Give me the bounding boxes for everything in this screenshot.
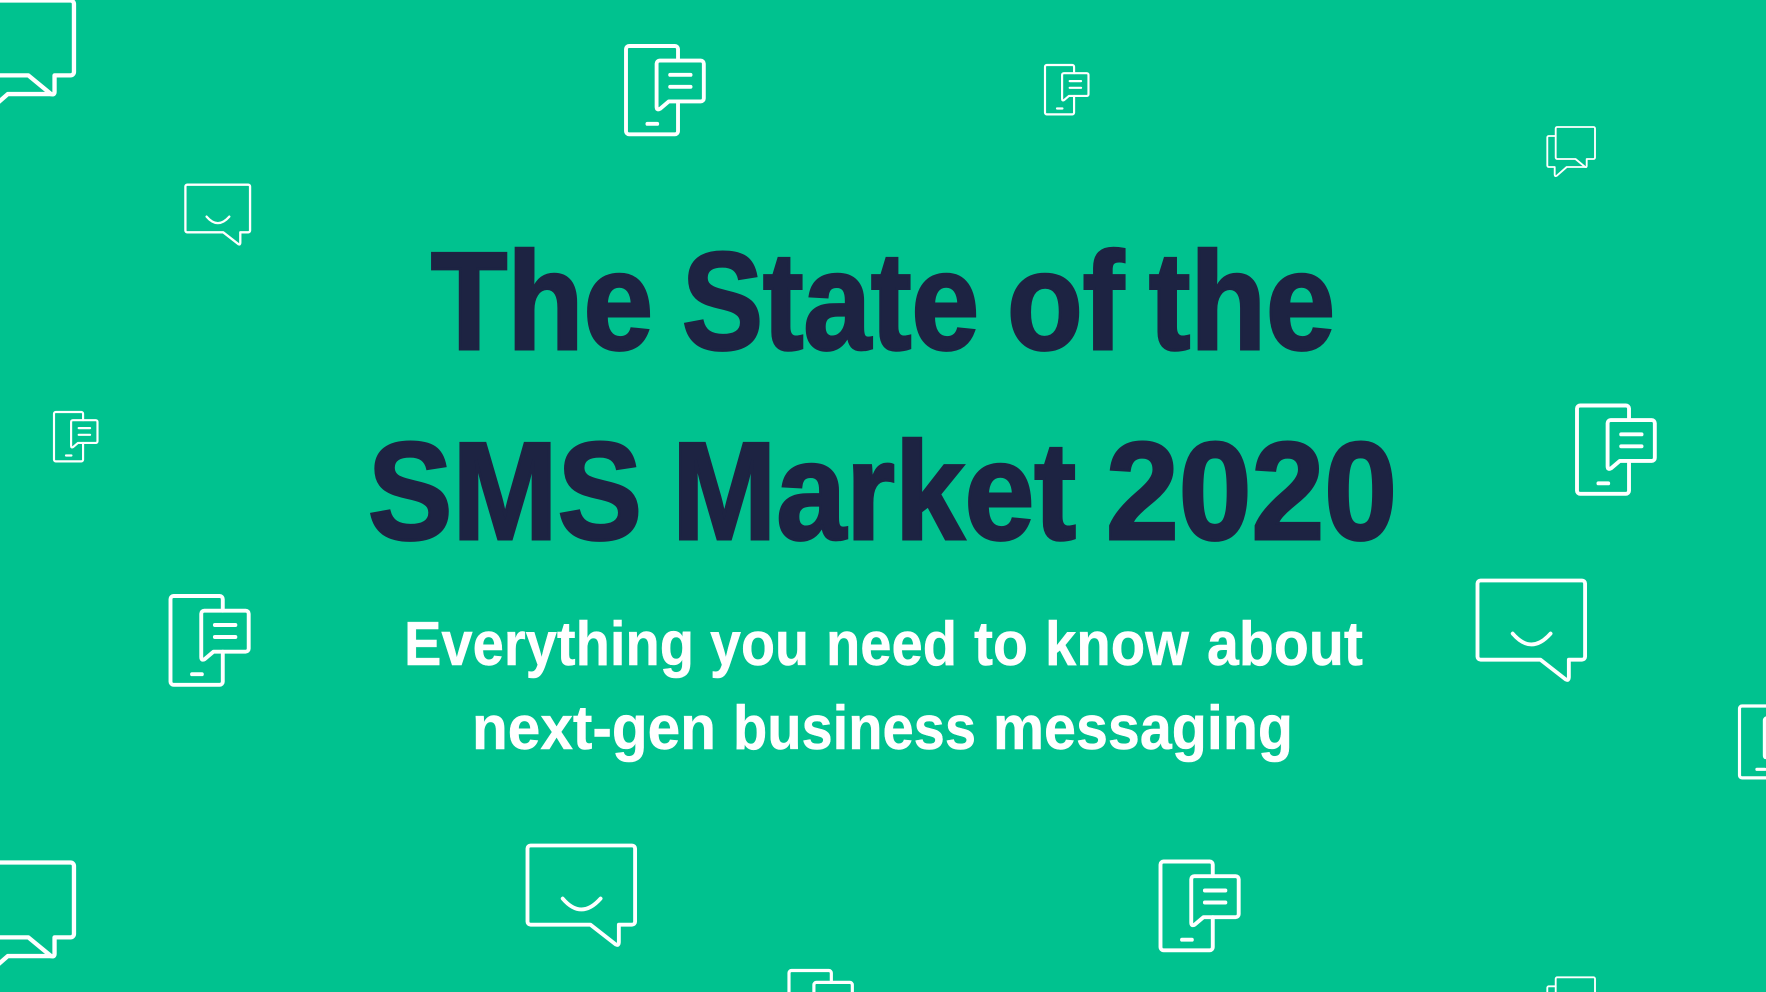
icon: phone message bottom edge	[789, 970, 852, 992]
icon: speech bubbles bottom right	[1547, 977, 1595, 992]
icon: phone message top centre	[626, 46, 704, 134]
title: of	[1007, 224, 1125, 379]
title: the	[1149, 224, 1335, 379]
icon: small phone message top	[1045, 65, 1088, 114]
icon: small phone message left	[54, 412, 97, 461]
icon: smile bubble bottom	[528, 846, 635, 945]
title	[368, 224, 1397, 569]
title: 2020	[1106, 414, 1397, 569]
icon: speech bubbles top right	[1547, 127, 1595, 176]
subtitle: to	[974, 610, 1028, 679]
subtitle: know	[1045, 610, 1190, 679]
subtitle	[404, 610, 1363, 763]
icon: speech bubbles top left	[0, 0, 74, 115]
subtitle: need	[826, 610, 957, 679]
subtitle: next-gen	[472, 694, 716, 763]
icon: phone message right	[1577, 406, 1655, 494]
title: State	[682, 224, 979, 379]
subtitle: you	[710, 610, 809, 679]
icon: smile bubble right	[1478, 580, 1585, 680]
icon: speech bubbles bottom left	[0, 862, 74, 977]
icon: phone message right edge	[1740, 706, 1766, 778]
subtitle: Everything	[404, 610, 694, 679]
subtitle: messaging	[993, 694, 1293, 763]
subtitle: business	[733, 694, 976, 763]
title: SMS	[368, 414, 642, 569]
title: Market	[672, 414, 1076, 569]
subtitle: about	[1207, 610, 1363, 679]
icon: phone message left	[170, 596, 249, 685]
title: The	[431, 224, 653, 379]
icon: smile bubble upper left	[185, 185, 250, 244]
icon: phone message bottom	[1160, 862, 1239, 950]
